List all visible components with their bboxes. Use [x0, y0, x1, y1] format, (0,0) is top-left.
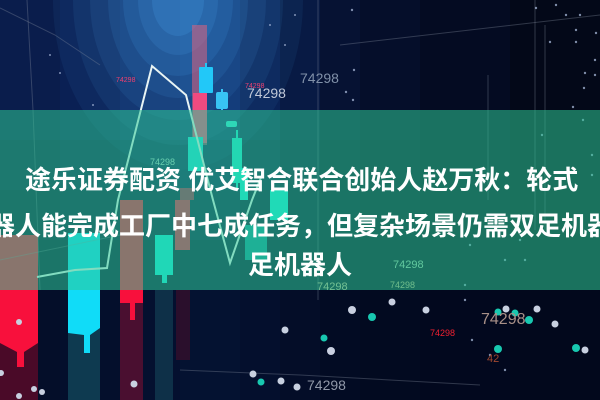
chart columns: [0, 25, 207, 400]
price labels: 74298: [317, 281, 348, 293]
price labels: 74298: [481, 311, 526, 328]
scattered dots: [0, 298, 588, 399]
price labels: 74298: [430, 328, 455, 338]
price labels: 74298: [245, 83, 265, 90]
teal title band: [0, 110, 600, 290]
price labels: 74298: [116, 77, 136, 84]
title: 足机器人: [248, 250, 352, 280]
price labels: 74298: [300, 70, 339, 86]
price labels: 74298: [247, 85, 286, 101]
price labels: 74298: [150, 157, 175, 167]
line chart: [37, 66, 262, 277]
blue glow: [53, 0, 303, 170]
price labels: [116, 70, 526, 393]
price labels: 74298: [307, 377, 346, 393]
teal dots: [258, 308, 580, 386]
price labels: 42: [487, 353, 499, 365]
price labels: 74298: [393, 259, 424, 271]
price labels: 74298: [390, 280, 415, 290]
candlesticks: [0, 63, 288, 367]
title: 途乐证券配资 优艾智合联合创始人赵万秋：轮式: [25, 165, 578, 195]
